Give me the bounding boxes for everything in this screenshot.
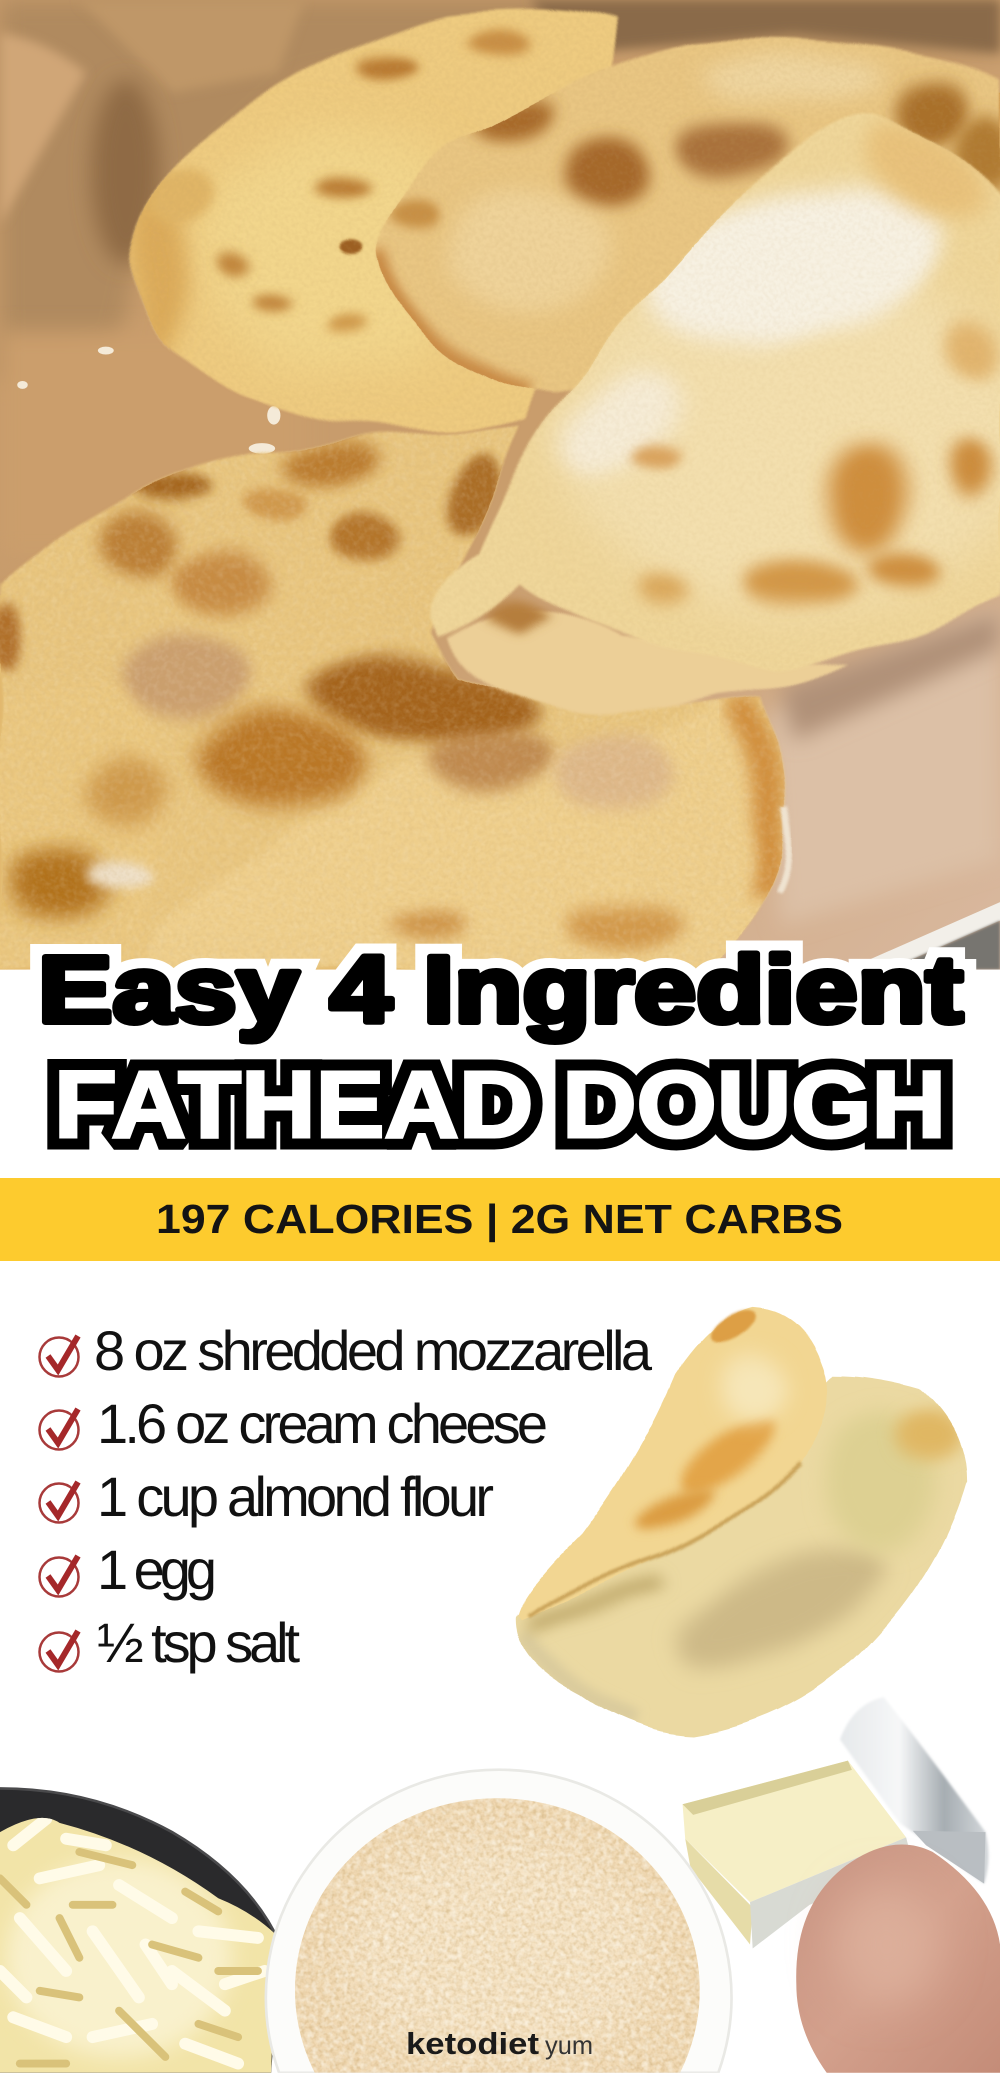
front flatbread with browned spots: [0, 423, 794, 970]
parchment background: [0, 0, 1000, 970]
upper folded bread: [519, 1303, 829, 1620]
title line 2: FATHEAD DOUGH: [54, 1052, 946, 1158]
ingredient: salt: ½ tsp salt: [97, 1611, 300, 1674]
nutrition banner: [0, 1178, 1000, 1261]
flatbreads group: [0, 0, 1000, 970]
lower bread: [516, 1376, 966, 1736]
title line 2: FATHEAD DOUGH: [54, 1052, 946, 1158]
crumbs on paper: [17, 347, 280, 454]
nutrition banner: 197 CALORIES | 2G NET CARBS: [156, 1196, 843, 1242]
black bowl of shredded mozzarella: [0, 1788, 280, 2073]
ingredient photos: [0, 1697, 1000, 2073]
ingredient: egg: 1 egg: [97, 1538, 217, 1601]
back middle flatbread: [370, 26, 1000, 410]
egg: [796, 1844, 1000, 2073]
title line 1: Easy 4 Ingredient: [38, 937, 963, 1043]
logo: ketodiet yum: [406, 2026, 593, 2061]
logo: ketodiet yum: yum: [545, 2030, 593, 2060]
title line 1: Easy 4 Ingredient: [38, 937, 963, 1043]
cream cheese and foil: [683, 1697, 988, 1948]
ingredient: almond flour: 1 cup almond flour: [97, 1465, 494, 1528]
ingredient list: [40, 1319, 653, 1674]
logo: ketodiet yum: ketodiet: [406, 2026, 539, 2061]
white bowl of almond flour: [266, 1770, 732, 2073]
ingredient: mozzarella: 8 oz shredded mozzarella: [94, 1319, 653, 1382]
under flatbread: [446, 599, 847, 712]
ingredient: egg: [40, 1538, 217, 1601]
folded floury flatbread: [423, 102, 1000, 675]
back left flatbread: [119, 0, 648, 437]
folded flatbread cut-out: [516, 1303, 966, 1736]
hero photo: flatbreads on parchment: [0, 0, 1000, 970]
ingredient: cream cheese: 1.6 oz cream cheese: [97, 1392, 548, 1455]
